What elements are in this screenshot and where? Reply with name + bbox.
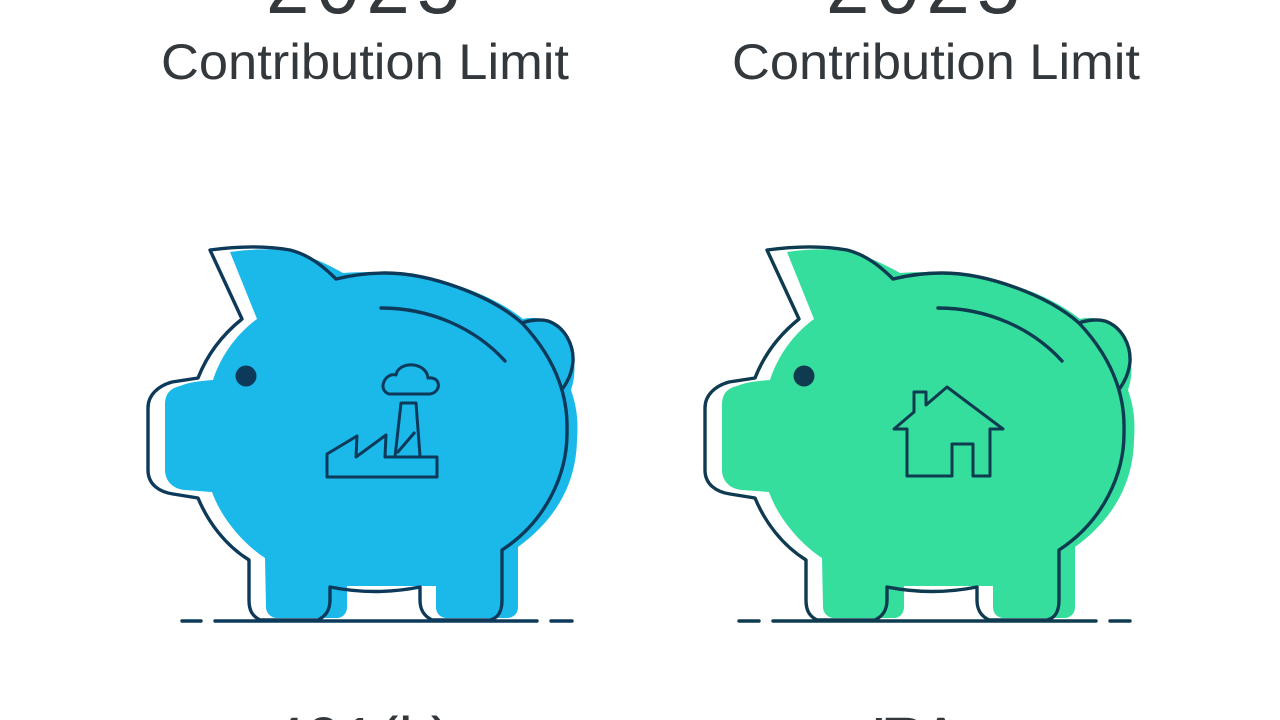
panel: 401(k) column — [148, 0, 577, 720]
piggy fill — [722, 249, 1134, 618]
coin slot highlight — [381, 308, 505, 361]
panel: IRA column — [705, 0, 1140, 720]
coin slot highlight — [938, 308, 1062, 361]
heading: contribution limit, IRA: Contribution Limit — [732, 34, 1140, 90]
ground line — [182, 619, 572, 623]
piggy ear — [522, 320, 573, 388]
icon: factory with smoke — [327, 365, 438, 477]
ground line — [739, 619, 1130, 623]
icon: blue piggy bank — [148, 247, 577, 621]
icon: house — [894, 387, 1003, 476]
icon: green piggy bank — [705, 247, 1134, 621]
piggy outline — [705, 247, 1124, 620]
piggy outline — [148, 247, 567, 620]
eye — [794, 366, 814, 386]
piggy fill — [165, 249, 577, 618]
eye — [236, 366, 256, 386]
piggy ear — [1079, 320, 1130, 388]
heading: contribution limit, 401(k): Contribution Limit — [161, 34, 569, 90]
